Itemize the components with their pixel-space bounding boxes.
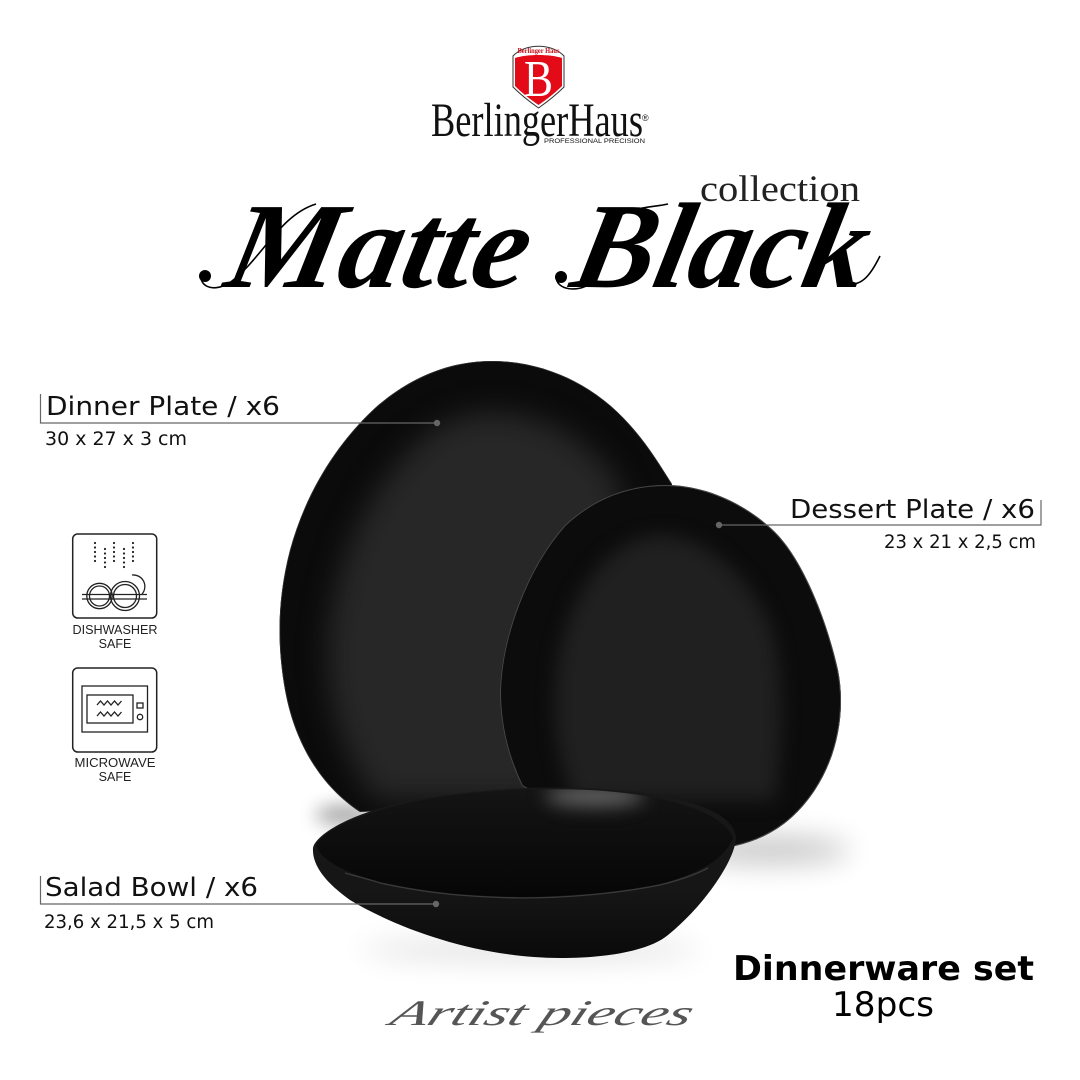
dessert plate size: 23 x 21 x 2,5 cm [884, 532, 1036, 553]
icon: microwave safe [73, 668, 157, 752]
title: Matte Black: Matte [214, 178, 545, 314]
dishwasher caption: DISHWASHER [72, 623, 158, 637]
icon: red shield [513, 46, 564, 108]
label: dessert plate [716, 495, 1041, 553]
label: dinner plate [40, 392, 440, 450]
label: salad bowl [40, 873, 439, 933]
leader line [40, 394, 440, 426]
icon: dishwasher safe [73, 534, 157, 618]
dinner plate size: 30 x 27 x 3 cm [45, 429, 187, 450]
dishwasher caption [72, 623, 158, 651]
brand logo [431, 46, 649, 147]
dishwasher caption: SAFE [99, 637, 131, 651]
leader line [716, 500, 1041, 528]
brand tagline: PROFESSIONAL PRECISION [544, 139, 645, 145]
subtitle: collection: collection [700, 169, 860, 210]
dinner plate [280, 361, 672, 812]
product heading: dinnerware set: 18pcs [832, 985, 934, 1025]
dinner plate name: Dinner Plate / x6 [46, 392, 280, 422]
title: Matte Black: Black [560, 178, 883, 314]
microwave caption: SAFE [99, 770, 131, 784]
microwave caption [74, 756, 156, 784]
icon: red shield: Berlinger Haus [518, 47, 560, 55]
dessert plate [500, 485, 841, 846]
icon: red shield: B [524, 51, 553, 108]
product heading: dinnerware set: Dinnerware set [733, 949, 1034, 989]
registered mark: ® [642, 113, 649, 123]
product heading: dinnerware set [733, 949, 1034, 1025]
leader line [40, 876, 439, 907]
salad bowl size: 23,6 x 21,5 x 5 cm [44, 912, 214, 933]
title: Matte Black [199, 178, 883, 314]
salad bowl name: Salad Bowl / x6 [45, 873, 258, 903]
dessert plate name: Dessert Plate / x6 [790, 495, 1035, 525]
script tagline: artist pieces: Artist pieces [380, 994, 700, 1034]
brand name: BerlingerHaus [431, 94, 643, 147]
dishes photo [280, 361, 850, 960]
soft shadows [315, 805, 850, 960]
microwave caption: MICROWAVE [74, 756, 156, 770]
salad bowl [313, 786, 736, 958]
